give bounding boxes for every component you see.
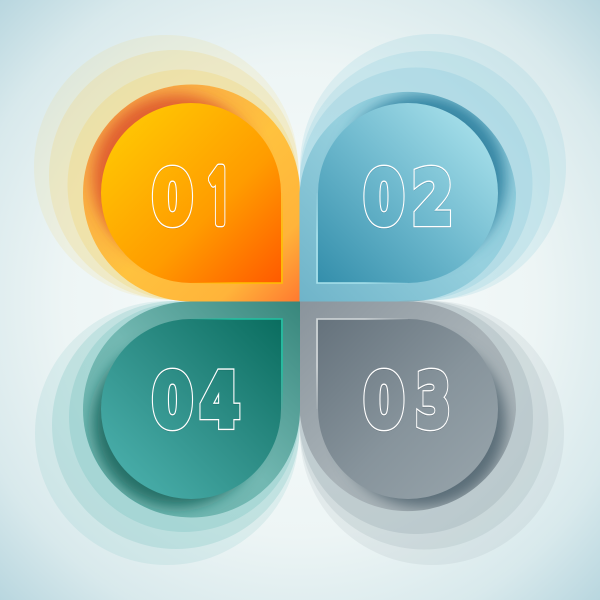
drop: orange petal face xyxy=(101,103,281,283)
number: 02 xyxy=(363,164,452,229)
number: 03 xyxy=(363,368,450,432)
plate: grey petal base xyxy=(300,302,516,511)
shadow: teal petal cast shadow xyxy=(93,339,261,507)
number: 04: 0 xyxy=(152,358,193,445)
shadow: orange petal cast shadow xyxy=(93,95,261,263)
number: 01: 1 xyxy=(204,162,234,235)
plate: orange petal base xyxy=(83,84,300,301)
corner highlight: orange petal xyxy=(191,193,282,283)
number: 04: 0 xyxy=(152,357,193,444)
drop: grey petal face xyxy=(318,319,498,499)
number: 01: 1 xyxy=(204,163,234,236)
plate: blue petal base xyxy=(300,92,516,302)
panel: 03 grey petal xyxy=(299,300,564,565)
rings: blue petal halo xyxy=(300,34,566,301)
plate: teal petal base xyxy=(83,302,300,518)
corner highlight: blue petal xyxy=(317,193,408,283)
number: 03: 3 xyxy=(415,357,451,444)
panel: 02 blue petal xyxy=(300,34,566,302)
number: 04: 4 xyxy=(200,358,240,445)
number: 01 xyxy=(152,164,226,229)
number: 04: 4 xyxy=(200,357,240,444)
number: 02: 2 xyxy=(412,156,453,242)
number: 01: 0 xyxy=(152,155,193,242)
corner highlight: grey petal xyxy=(317,319,408,409)
panel: 01 orange petal xyxy=(34,35,300,302)
number: 02: 2 xyxy=(412,155,453,241)
shadow: grey petal cast shadow xyxy=(338,339,506,507)
number: 04 xyxy=(152,368,240,432)
number: 03: 0 xyxy=(364,358,404,445)
number: 01: 0 xyxy=(152,154,193,241)
drop: teal petal face xyxy=(101,319,281,499)
rings: grey petal halo xyxy=(299,300,564,565)
corner highlight: teal petal xyxy=(191,319,282,409)
shadow: blue petal cast shadow xyxy=(338,95,506,263)
rings: orange petal halo xyxy=(34,35,299,300)
number: 03: 3 xyxy=(415,358,451,445)
number: 02: 0 xyxy=(364,154,404,241)
rings: teal petal halo xyxy=(35,301,300,565)
drop: blue petal face xyxy=(318,103,498,283)
number: 03: 0 xyxy=(364,357,404,444)
number: 02: 0 xyxy=(364,155,404,242)
panel: 04 teal petal xyxy=(35,301,300,565)
